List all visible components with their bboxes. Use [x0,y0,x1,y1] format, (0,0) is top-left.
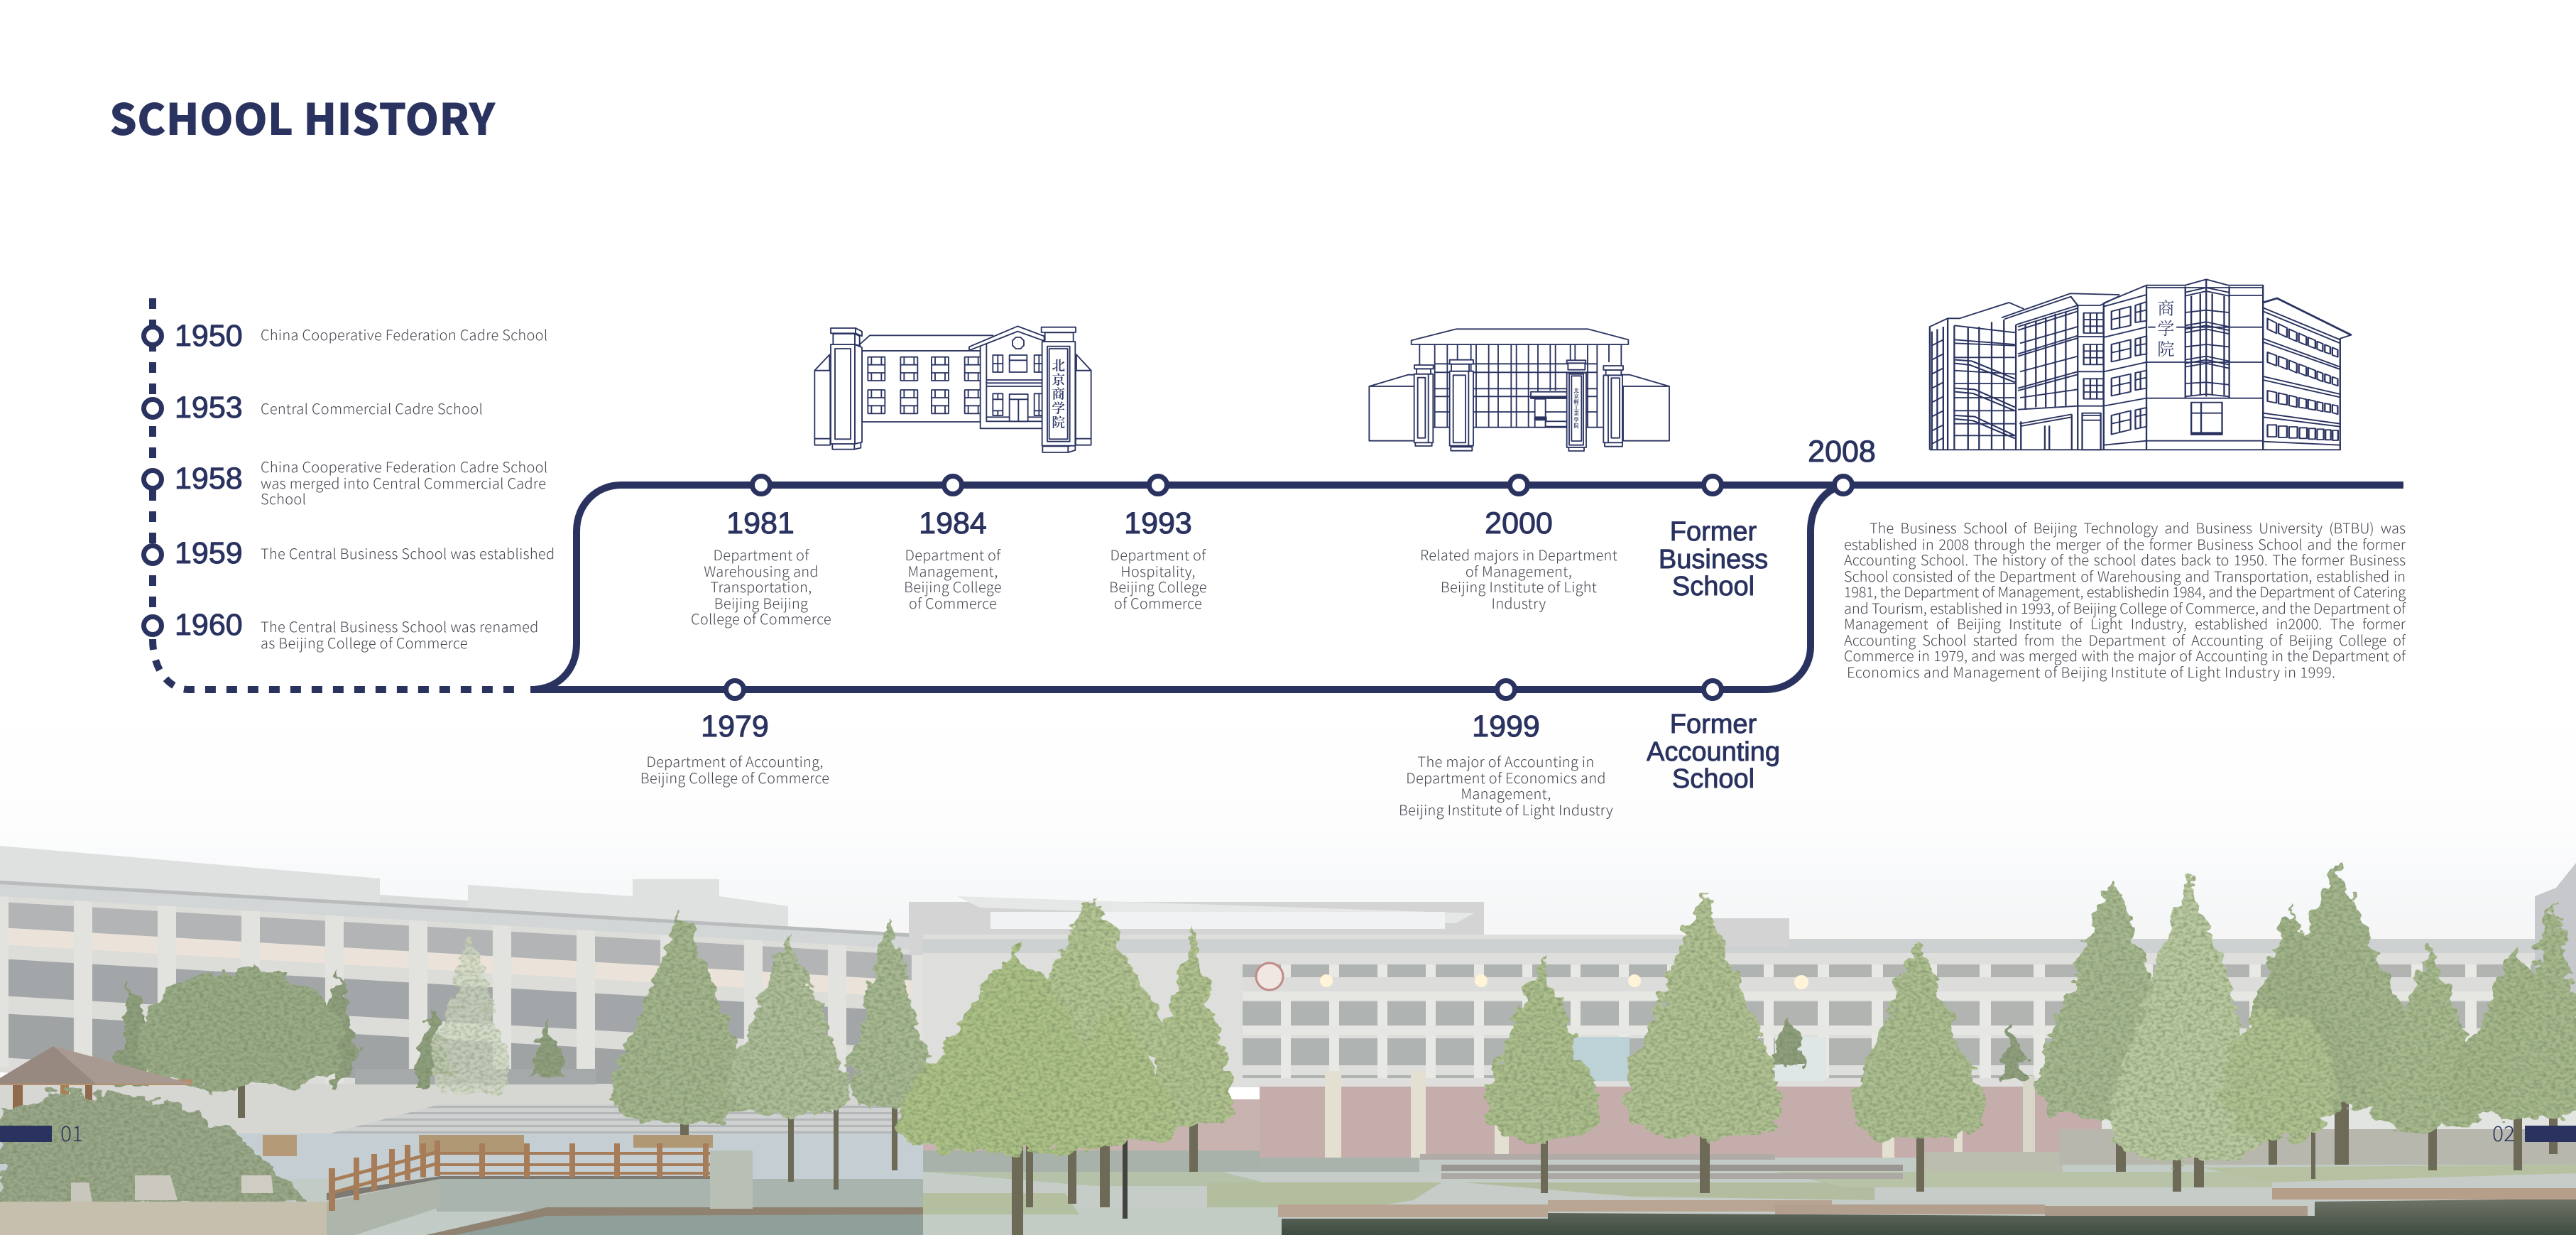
text: was merged into Central Commercial Cadre [261,472,546,493]
icon: Business School building: 商 [2157,295,2175,320]
text: 1984 [919,506,987,540]
early history: 1953 [175,391,483,425]
text: Beijing Institute of Light Industry [1399,798,1613,820]
building: left wing facade [0,881,923,1126]
text: 1993 [1124,506,1192,540]
text: 1953 [175,391,243,425]
text: Beijing College [1109,576,1207,597]
summary paragraph: established in 2008 through the merger of the former Business School and the former [1844,533,2406,554]
footer: page number right: 02 [2492,1116,2515,1148]
sky [0,710,2576,994]
icon: Beijing Institute of Light Industry building: 北 [1573,388,1579,395]
icon: Beijing Institute of Light Industry building: 學 [1573,416,1579,423]
text: Management, [1461,783,1551,803]
icon: Beijing College of Commerce building: 院 [1052,413,1065,432]
text: Department of [905,544,1000,565]
milestone 1984 [904,506,1002,612]
summary paragraph: and Tourism, established in 1993, of Beijing College of Commerce, and the Department of [1844,597,2406,618]
text: Department of Accounting, [646,751,824,771]
early history: 1960 [175,608,539,652]
summary paragraph: 1981, the Department of Management, establishedin 1984, and the Department of Catering [1844,581,2406,602]
ground and lawns [0,1133,2576,1235]
label: Former Accounting School [1646,709,1780,794]
text: Warehousing and [704,560,819,581]
text: The major of Accounting in [1417,751,1595,771]
text: as Beijing College of Commerce [261,632,468,652]
text: China Cooperative Federation Cadre School [261,324,547,344]
text: Transportation, [711,576,812,597]
text: of Commerce [1114,592,1202,612]
icon: Beijing Institute of Light Industry building: 業 [1573,410,1580,418]
text: School [261,488,306,508]
summary paragraph: Accounting School. The history of the school dates back to 1950. The former Business [1844,549,2406,570]
text: 1959 [175,536,243,570]
title: SCHOOL HISTORY [109,85,495,148]
ground base [0,1133,2576,1235]
milestone 2000 [1420,506,1617,612]
gazebo and bushes [0,1046,713,1207]
label: Former Business School: Former [1670,517,1757,547]
icon: Beijing Institute of Light Industry building: 工 [1573,405,1579,412]
early history: 1950 [175,319,547,353]
text: 2000 [1485,506,1553,540]
text: Department of [1110,544,1206,565]
summary paragraph: The Business School of Beijing Technology and Business University (BTBU) was [1870,517,2406,538]
text: 1979 [701,709,769,744]
text: The Central Business School was established [261,543,555,563]
text: 1950 [175,319,243,353]
icon: Beijing Institute of Light Industry building: 輕 [1573,399,1579,406]
milestone 1979 [640,709,829,787]
label: Former Accounting School: Accounting [1647,737,1780,767]
label: Former Business School: School [1672,572,1754,602]
stone wall and wooden fence [0,1141,753,1235]
summary paragraph: Commerce in 1979, and was merged with the major of Accounting in the Department of [1844,645,2406,665]
text: 1958 [175,462,243,496]
footer: page number right [2492,1116,2576,1148]
text: Beijing Beijing [714,592,808,612]
icon: Beijing College of Commerce building: 北 [1052,357,1065,375]
label: Former Accounting School: Former [1670,709,1757,739]
dashed early timeline [153,298,520,690]
text: The Central Business School was renamed [261,616,539,636]
text: of Management, [1466,560,1572,581]
solid upper and lower timeline [530,485,2403,690]
summary paragraph: Economics and Management of Beijing Institute of Light Industry in 1999. [1847,660,2336,682]
text: Industry [1492,592,1546,612]
summary paragraph [1844,517,2406,682]
summary paragraph: Accounting School started from the Department of Accounting of Beijing College of [1844,629,2406,649]
icon: Beijing Institute of Light Industry building: 院 [1573,423,1579,430]
text: Hospitality, [1120,560,1196,581]
milestone 2008: 2008 [1808,435,1876,469]
text: Beijing College [904,576,1002,597]
label: Former Accounting School: School [1672,764,1754,794]
milestone 1999 [1399,709,1613,820]
early history: 1958 [175,456,547,508]
text: Department of Economics and [1406,767,1606,787]
timeline nodes [143,327,1852,699]
text: 1960 [175,608,243,642]
icon: Business School building: 院 [2157,335,2175,360]
footer: page number left: 01 [60,1116,83,1148]
icon: Beijing College of Commerce building: 京 [1052,371,1065,389]
foliage: main trees [114,862,2576,1163]
text: Central Commercial Cadre School [261,398,483,418]
text: 1981 [726,506,795,540]
building: left rear roof blocks [0,846,788,945]
building: central block and facade [909,863,2576,1088]
text: College of Commerce [691,608,831,629]
text: China Cooperative Federation Cadre School [261,456,547,477]
footer: page number left [0,1116,83,1148]
text: Related majors in Department [1420,544,1617,565]
label: Former Business School [1659,517,1768,602]
pond [426,1188,2576,1235]
icon: Beijing College of Commerce building: 商 [1052,385,1065,403]
text: of Commerce [909,592,997,612]
text: Beijing Institute of Light [1441,576,1597,597]
terrace walls [0,1069,2576,1186]
summary paragraph: School consisted of the Department of Warehousing and Transportation, established in [1844,565,2406,585]
tree trunks [238,1079,2558,1235]
icon: Beijing Institute of Light Industry building: 京 [1573,393,1579,401]
text: Beijing College of Commerce [640,767,829,787]
milestone 1981 [691,506,831,629]
icon: Business School building: 学 [2157,315,2175,339]
summary paragraph: Management of Beijing Institute of Light Industry, established in2000. The former [1844,613,2406,633]
text: Department of [713,544,809,565]
text: Management, [907,560,998,581]
milestone 1993 [1109,506,1207,612]
early history: 1959 [175,536,555,570]
text: 1999 [1472,709,1540,744]
label: Former Business School: Business [1659,544,1768,574]
icon: Beijing College of Commerce building: 学 [1052,399,1065,418]
